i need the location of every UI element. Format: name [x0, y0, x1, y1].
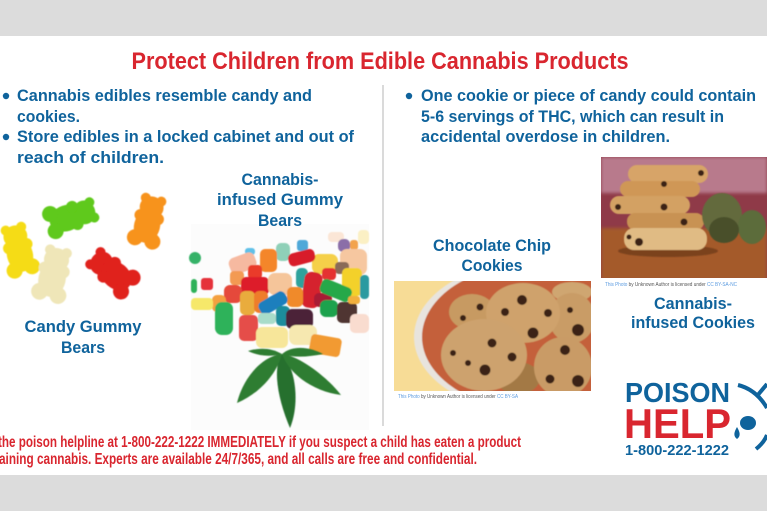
chocolate chip cookies heading: Cookies — [462, 256, 522, 275]
chocolate chip cookies photo — [394, 262, 646, 412]
heading: cannabis-infused cookies: Cannabis- — [654, 294, 732, 313]
bottom grey band — [0, 475, 767, 511]
heading: candy gummy bears — [24, 317, 142, 357]
icon: skull — [734, 384, 767, 449]
heading: candy gummy bears: Candy Gummy — [24, 317, 142, 336]
photo credit: cannabis cookies: This Photo by Unknown Author is licensed under CC BY-SA-NC — [605, 282, 737, 288]
poison helpline message — [0, 434, 521, 468]
heading: cannabis-infused cookies — [631, 294, 755, 332]
left bullet list: Store edibles in a locked cabinet and out of — [17, 127, 354, 146]
left bullet list — [3, 86, 354, 167]
left bullet list: reach of children. — [17, 148, 164, 167]
heading: cannabis-infused cookies: infused Cookies — [631, 313, 755, 332]
right bullet list: 5-6 servings of THC, which can result in — [421, 107, 724, 126]
photo credit: chocolate chip cookies: This Photo by Unknown Author is licensed under CC BY-SA — [398, 394, 519, 400]
right bullet list: accidental overdose in children. — [421, 127, 670, 146]
title: Protect Children from Edible Cannabis Products — [132, 48, 628, 75]
candy gummy bears photo — [0, 191, 171, 306]
cannabis leaf — [237, 348, 341, 428]
left bullet list: Cannabis edibles resemble candy and — [17, 86, 312, 105]
poison help logo: POISON — [625, 377, 730, 408]
poison help logo: 1-800-222-1222 — [625, 443, 729, 459]
poison helpline message: the poison helpline at 1-800-222-1222 IMMEDIATELY if you suspect a child has eaten a product — [0, 434, 521, 451]
center divider — [382, 85, 384, 426]
poison help logo — [624, 377, 767, 459]
chocolate chip cookies heading — [433, 236, 551, 275]
top grey band — [0, 0, 767, 36]
cannabis gummy bears photo — [189, 224, 369, 430]
right bullet list — [406, 86, 756, 146]
chocolate chip cookies heading: Chocolate Chip — [433, 236, 551, 255]
poison helpline message: aining cannabis. Experts are available 24/7/365, and all calls are free and confidential. — [0, 451, 477, 468]
right bullet list: One cookie or piece of candy could contain — [421, 86, 756, 105]
heading: cannabis-infused gummy bears: Bears — [258, 211, 302, 230]
heading: cannabis-infused gummy bears: infused Gummy — [217, 190, 344, 209]
heading: candy gummy bears: Bears — [61, 338, 105, 357]
heading: cannabis-infused gummy bears — [217, 170, 344, 230]
heading: cannabis-infused gummy bears: Cannabis- — [242, 170, 318, 189]
left bullet list: cookies. — [17, 107, 80, 126]
cannabis cookies photo — [601, 157, 767, 280]
poison help logo: HELP — [624, 400, 731, 447]
